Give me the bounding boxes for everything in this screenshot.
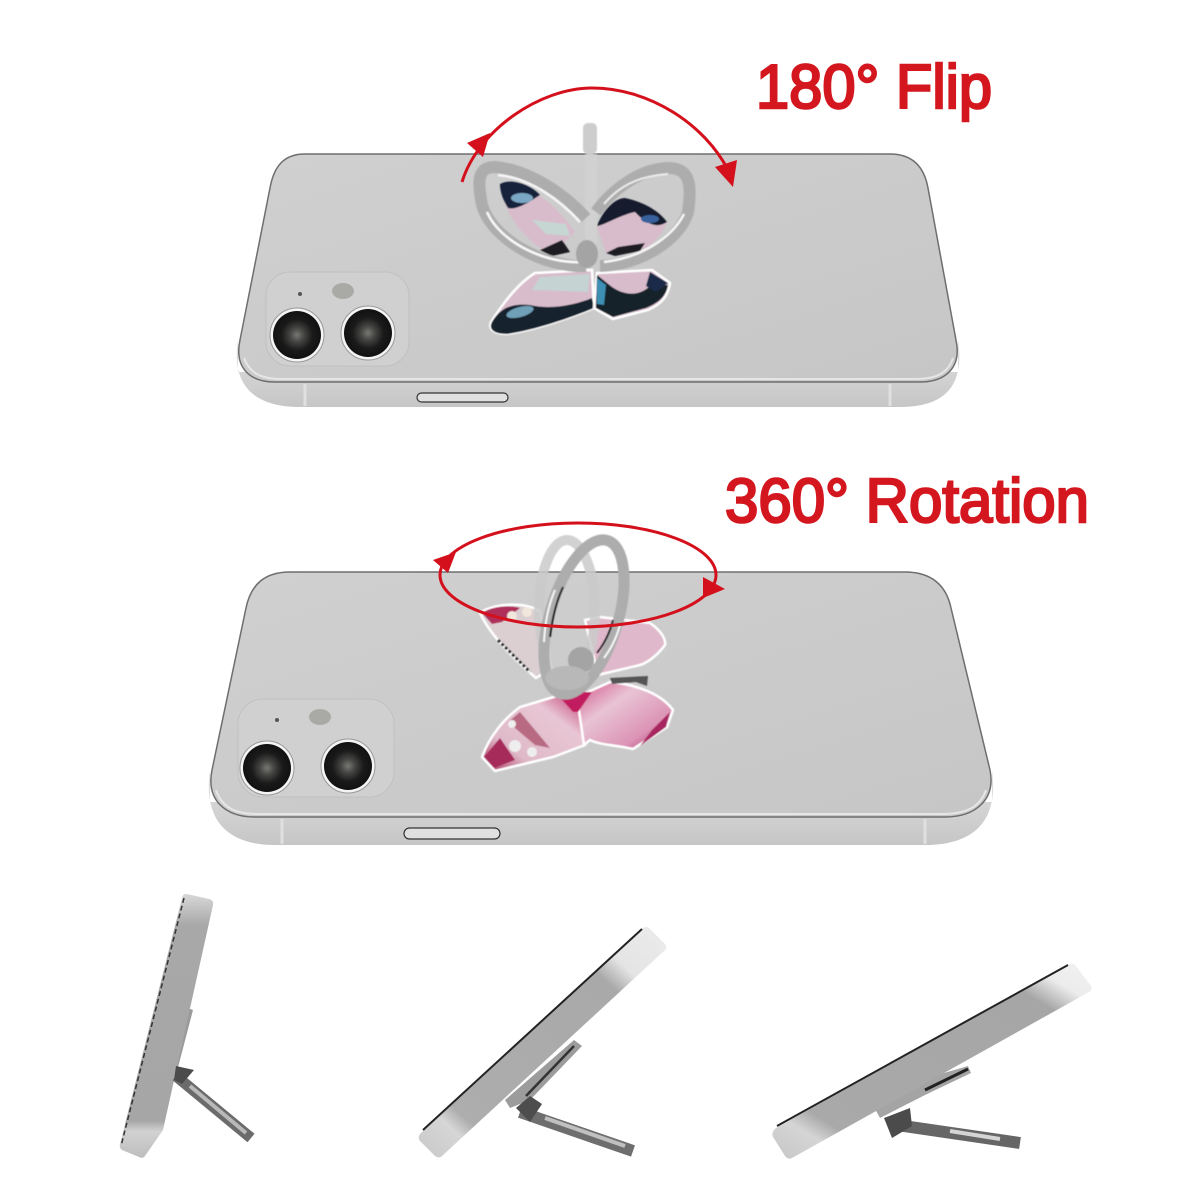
phone 2 back glass: [211, 572, 991, 817]
phone 2 butterfly holder: [480, 531, 673, 771]
phone edge: [120, 894, 213, 1158]
phone 2 side frame: [209, 770, 993, 845]
plate: [505, 1040, 582, 1108]
ring loops: [479, 167, 586, 266]
heading: 360° Rotation: 360° Rotation: [725, 467, 1089, 536]
heading: 180° Flip: 180° Flip: [756, 53, 992, 122]
lens right: [341, 306, 395, 360]
phone 1 back glass: [239, 154, 957, 382]
phone 2 camera module: [238, 699, 394, 797]
rotation arrow: [433, 523, 725, 627]
mic dot: [298, 292, 302, 296]
phone 1: back view with blue butterfly holder: [237, 88, 959, 407]
phone 1 camera module: [266, 272, 409, 366]
lower wings: [490, 270, 594, 334]
phone 2: back view with pink butterfly holder: [209, 523, 993, 845]
stand view 2: tilted phone: [419, 927, 666, 1158]
ring dark edges: [550, 587, 613, 653]
stand view 3: shallow tilted phone: [772, 964, 1092, 1159]
kickstand: [174, 1066, 251, 1138]
lens left: [270, 308, 324, 362]
hub: [576, 240, 598, 268]
phone 2 side button: [404, 828, 500, 839]
upper wings: [500, 183, 575, 254]
lens left: [240, 741, 294, 795]
kickstand: [516, 1096, 633, 1151]
phone edge: [772, 964, 1092, 1159]
flash: [332, 283, 354, 299]
lower wings: [482, 693, 585, 771]
mic dot: [275, 718, 279, 722]
phone 1 side button: [417, 393, 508, 402]
translucent stem: [583, 123, 597, 154]
kickstand: [884, 1108, 1020, 1143]
lens right: [321, 739, 375, 793]
flash: [309, 709, 331, 725]
phone 1 side frame: [237, 340, 959, 407]
phone 2 antenna bands: [282, 819, 925, 844]
upper wings: [480, 605, 552, 678]
flip arrow: [462, 88, 737, 187]
back ring, translucent: [539, 540, 595, 680]
phone 1 antenna bands: [305, 384, 890, 406]
stand view 1: nearly upright phone: [120, 894, 251, 1158]
phone edge: [419, 927, 666, 1158]
phone 2 bottom highlight: [216, 790, 986, 814]
phone 1 bottom highlight: [244, 358, 953, 379]
plate: [165, 1008, 193, 1082]
hub: [568, 647, 594, 673]
phone 1 butterfly holder: [479, 123, 690, 334]
plate: [870, 1066, 971, 1118]
front ring: [528, 531, 640, 703]
